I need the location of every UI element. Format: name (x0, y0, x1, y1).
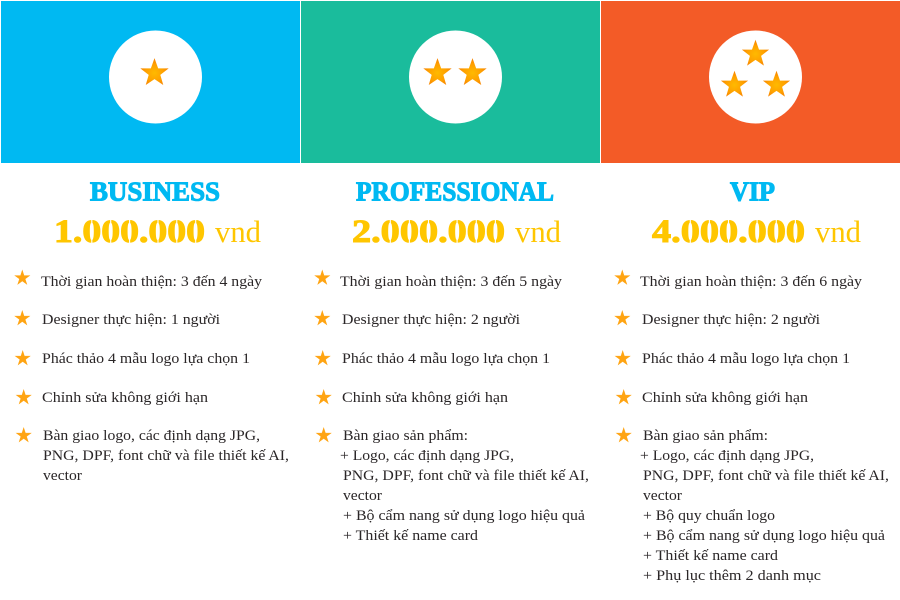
feature list: professional: Bàn giao sản phẩm: (343, 428, 468, 444)
feature list: business: Bàn giao logo, các định dạng JPG, (43, 428, 260, 444)
feature list: professional: + Logo, các định dạng JPG, (340, 448, 514, 464)
header band: business (1, 1, 300, 163)
price: professional: vnd (515, 214, 561, 249)
feature list: professional: + Bộ cẩm nang sử dụng logo hiệu quả (343, 508, 586, 524)
price: vip: 4.000.000 (652, 214, 805, 250)
feature list: vip: + Thiết kế name card (643, 548, 779, 564)
feature list: professional: Thời gian hoàn thiện: 3 đến 5 ngày (340, 274, 563, 290)
feature list: vip: Thời gian hoàn thiện: 3 đến 6 ngày (640, 274, 863, 290)
icon: white circle with two stars (409, 30, 502, 124)
header band: professional (301, 1, 600, 163)
feature list: professional: vector (343, 488, 382, 504)
feature list: vip: Designer thực hiện: 2 người (642, 312, 820, 328)
panel: business plan (1, 1, 300, 484)
feature list: vip: PNG, DPF, font chữ và file thiết kế AI, (643, 468, 889, 484)
feature list: vip: Bàn giao sản phẩm: (643, 428, 768, 444)
feature list: vip: + Bộ quy chuẩn logo (643, 508, 775, 524)
price: professional (352, 214, 561, 250)
feature list: business: Designer thực hiện: 1 người (42, 312, 220, 328)
price: business (54, 214, 261, 250)
feature list: business: Phác thảo 4 mẫu logo lựa chọn 1 (42, 351, 250, 367)
header band: vip (601, 1, 900, 163)
icon: white circle with three stars (709, 30, 802, 124)
panel: professional plan (301, 1, 600, 544)
feature list: vip: + Bộ cẩm nang sử dụng logo hiệu quả (643, 528, 886, 544)
icon: white circle with one star (109, 30, 202, 124)
price: professional: 2.000.000 (352, 214, 505, 250)
feature list: business: Chỉnh sửa không giới hạn (42, 390, 209, 406)
panel: vip plan (601, 1, 900, 584)
feature list: business: vector (43, 468, 82, 484)
feature list: vip: Chỉnh sửa không giới hạn (642, 390, 809, 406)
feature list: professional: PNG, DPF, font chữ và file thiết kế AI, (343, 468, 589, 484)
feature list: business: Thời gian hoàn thiện: 3 đến 4 ngày (41, 274, 263, 290)
feature list: professional (315, 270, 589, 544)
heading: professional: PROFESSIONAL (356, 176, 554, 206)
feature list: business: PNG, DPF, font chữ và file thiết kế AI, (43, 448, 289, 464)
feature list: vip: Phác thảo 4 mẫu logo lựa chọn 1 (642, 351, 850, 367)
heading: vip: VIP (730, 176, 775, 206)
feature list: vip: + Logo, các định dạng JPG, (640, 448, 814, 464)
price: business: vnd (215, 214, 261, 249)
feature list: professional: Designer thực hiện: 2 người (342, 312, 520, 328)
feature list: vip (615, 270, 889, 584)
price: vip: vnd (815, 214, 861, 249)
feature list: business (15, 270, 289, 484)
price: vip (652, 214, 861, 250)
feature list: vip: vector (643, 488, 682, 504)
feature list: professional: Phác thảo 4 mẫu logo lựa chọn 1 (342, 351, 550, 367)
feature list: professional: Chỉnh sửa không giới hạn (342, 390, 509, 406)
feature list: vip: + Phụ lục thêm 2 danh mục (643, 568, 822, 584)
heading: business: BUSINESS (90, 176, 220, 206)
feature list: professional: + Thiết kế name card (343, 528, 479, 544)
price: business: 1.000.000 (54, 214, 205, 250)
